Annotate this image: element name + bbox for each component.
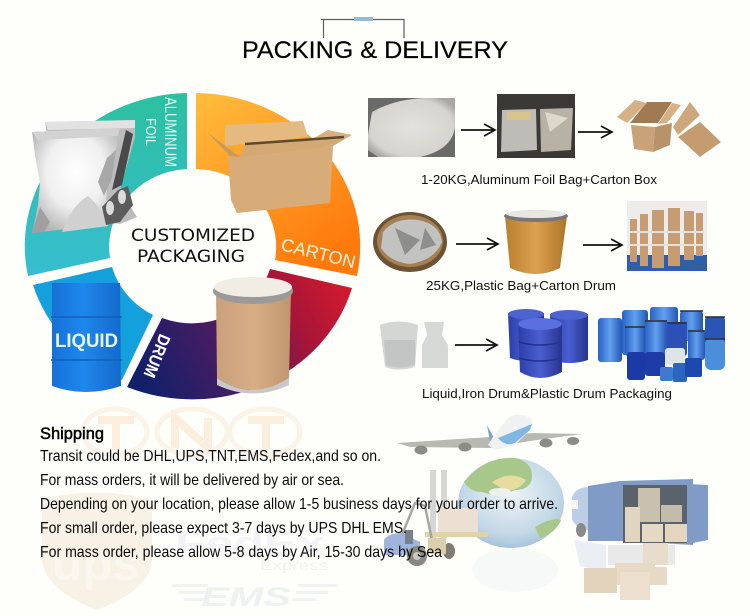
icon: blue liquid drum: [51, 283, 122, 392]
photo: foil bags on dark: [497, 94, 575, 158]
icon: open carton box: [208, 121, 352, 213]
label: foil: FOIL: [142, 118, 159, 146]
watermark: EMS: EMS: [201, 582, 291, 612]
label: drum: DRUM: [139, 332, 174, 380]
photo: drum with foil bag: [373, 212, 447, 272]
line 2: For mass orders, it will be delivered by air or sea.: [40, 472, 344, 489]
title ornament: [321, 17, 404, 38]
photo: powder: [368, 98, 455, 157]
watermark: FedEx Express: [175, 523, 328, 573]
watermark: EMS: [172, 582, 338, 612]
line 3: Depending on your location, please allow 1-5 business days for your order to arrive.: [40, 496, 558, 513]
photo: iron drums: [508, 309, 588, 378]
watermark: UPS shield: ups: [52, 538, 140, 591]
line 5: For mass order, please allow 5-8 days by Air, 15-30 days by Sea: [40, 544, 442, 561]
arrow: [456, 238, 498, 250]
photo: beaker and bottle: [380, 322, 448, 370]
arrow: [583, 239, 622, 251]
line 1: Transit could be DHL,UPS,TNT,EMS,Fedex,and so on.: [40, 448, 381, 465]
segment: carton: [196, 93, 360, 276]
row 1: aluminum foil bag and carton box: [368, 94, 721, 187]
illustration: airplane: [397, 414, 582, 454]
icon: blue liquid drum: LIQUID: [55, 330, 118, 352]
photo: stacked carton drums: [627, 201, 707, 271]
icon: aluminum foil bags: [32, 120, 137, 233]
heading: shipping: Shipping: [40, 424, 104, 443]
arrow: [578, 126, 612, 138]
segment: aluminum foil: [25, 93, 187, 276]
caption: 25KG,Plastic Bag+Carton Drum: [426, 279, 616, 293]
panel: customized packaging wheel: [25, 93, 360, 399]
title: PACKING & DELIVERY: [242, 37, 508, 64]
photo: plastic drums and jerrycans: [598, 307, 725, 382]
photo: carton boxes: [617, 100, 721, 157]
caption: 1-20KG,Aluminum Foil Bag+Carton Box: [421, 173, 658, 187]
icon: carton drum: [213, 277, 293, 394]
arrow: [455, 339, 497, 351]
line 4: For small order, please expect 3-7 days by UPS DHL EMS.: [40, 520, 407, 537]
row 2: plastic bag and carton drum: [373, 201, 707, 293]
watermark: UPS shield: [42, 492, 152, 610]
caption: Liquid,Iron Drum&Plastic Drum Packaging: [422, 387, 672, 401]
label: aluminum: ALUMINUM: [161, 97, 180, 167]
illustration: forklift: [384, 470, 488, 566]
watermark: TNT logo: [83, 409, 300, 455]
watermark: FedEx Express: FedEx: [175, 523, 325, 564]
center text: packaging: PACKAGING: [137, 247, 245, 267]
text block: shipping: [40, 424, 558, 561]
row 3: liquid packaging: [380, 307, 725, 401]
center text: customized packaging: CUSTOMIZED: [131, 226, 255, 246]
segment: liquid: [33, 267, 153, 380]
segment: drum: [127, 269, 352, 399]
arrow: [461, 124, 495, 136]
label: carton: CARTON: [279, 234, 358, 272]
watermark: FedEx Express: Express: [260, 557, 328, 573]
illustration: container truck with boxes: [571, 479, 708, 600]
photo: carton drum: [504, 210, 568, 274]
illustration: globe: [458, 458, 564, 592]
